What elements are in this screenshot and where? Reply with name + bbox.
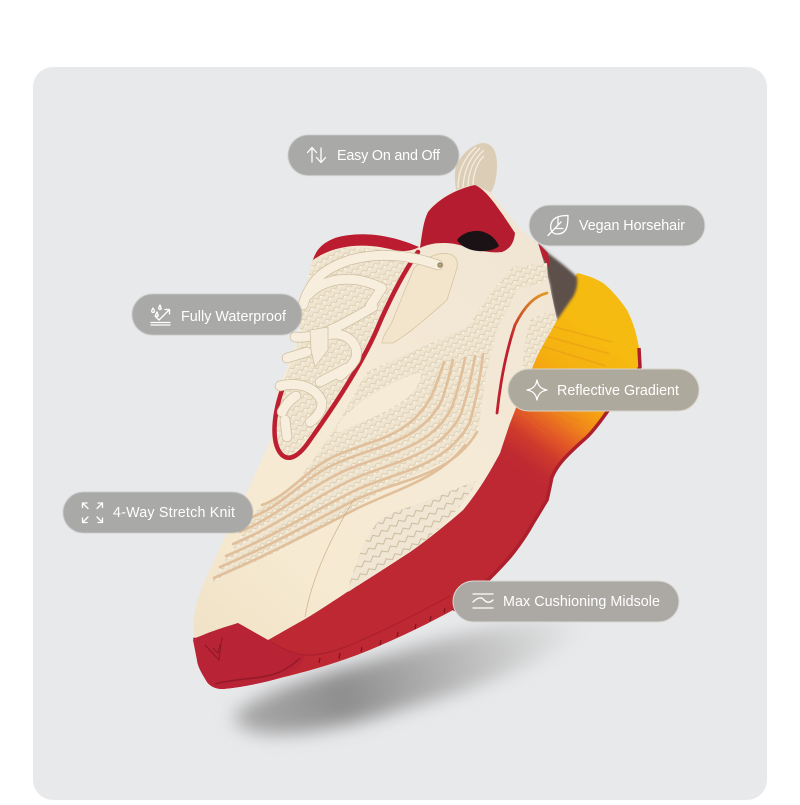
shoe illustration	[193, 143, 640, 689]
pill: 4-Way Stretch Knit	[63, 492, 253, 533]
red piping	[274, 252, 418, 458]
horsehair heel	[538, 243, 577, 320]
pill: Reflective Gradient: Reflective Gradient	[557, 383, 679, 399]
orange ribs	[522, 325, 612, 436]
upper	[194, 185, 557, 640]
pill: Vegan Horsehair: Vegan Horsehair	[579, 218, 685, 234]
smooth wedge overlay	[337, 373, 421, 433]
pull tab	[455, 143, 497, 195]
icon: sparkle star	[527, 380, 547, 400]
heel accent line	[497, 293, 547, 413]
pill: 4-Way Stretch Knit: 4-Way Stretch Knit	[113, 505, 235, 521]
pill: Fully Waterproof: Fully Waterproof	[181, 309, 286, 325]
stitch lines	[305, 498, 355, 617]
shoe shadow	[234, 616, 590, 734]
outsole rim	[453, 348, 640, 610]
pill: Reflective Gradient	[508, 369, 699, 411]
icon: leaf	[548, 216, 568, 236]
pill: Easy On and Off	[288, 135, 459, 176]
collar lining	[420, 185, 515, 252]
pill: Max Cushioning Midsole: Max Cushioning Midsole	[503, 594, 660, 610]
toe cap	[193, 623, 305, 689]
laces	[280, 255, 442, 437]
icon: water repellent	[151, 305, 170, 325]
pill: Easy On and Off: Easy On and Off	[337, 148, 440, 164]
icon: up and down arrows	[308, 148, 326, 162]
heel knit patch	[522, 310, 557, 385]
tread ticks	[319, 608, 445, 663]
side knit with stripes	[210, 263, 548, 585]
midsole and outsole	[193, 273, 640, 689]
knit vamp	[273, 247, 413, 458]
lower knit patch	[348, 480, 478, 592]
icon: expand arrows	[82, 503, 102, 522]
pill: Vegan Horsehair	[529, 205, 705, 246]
tread fold line	[268, 596, 450, 655]
pill: Max Cushioning Midsole	[453, 581, 679, 622]
eyestay panel	[382, 253, 457, 343]
top red collar	[313, 234, 419, 260]
icon: cushioning waves	[473, 594, 493, 608]
pill: Fully Waterproof	[132, 294, 302, 335]
